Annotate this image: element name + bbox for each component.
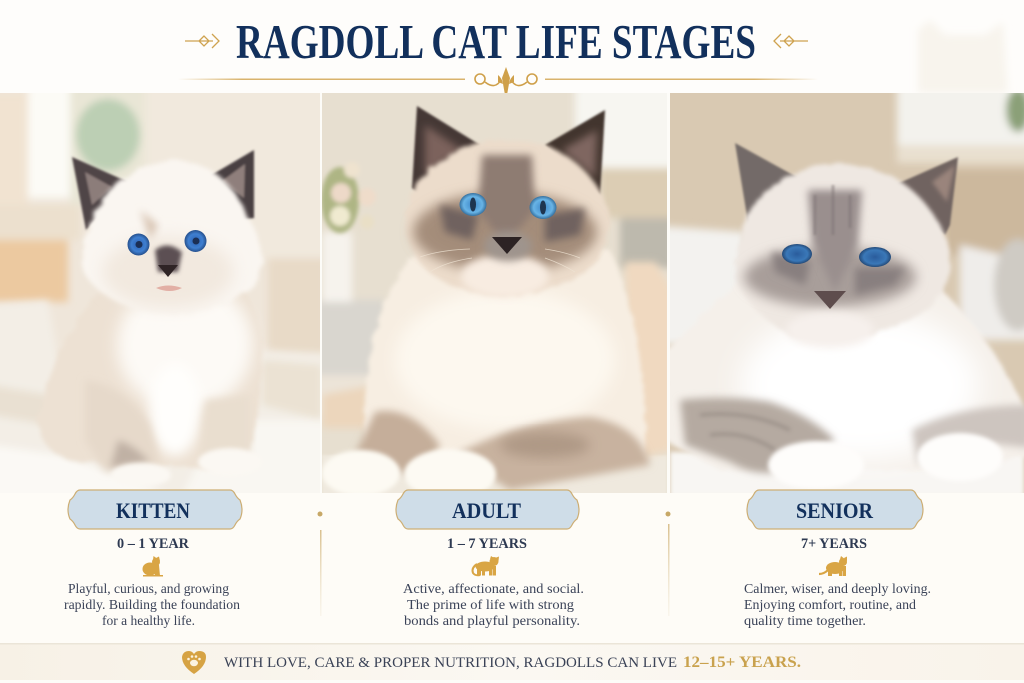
senior paws bbox=[766, 430, 1003, 480]
senior eyes bbox=[782, 244, 812, 264]
kitten room background bbox=[0, 85, 330, 354]
description: adult: Active, affectionate, and social. bbox=[403, 581, 584, 596]
photo panel: senior bbox=[660, 85, 1024, 497]
icon: senior silhouette bbox=[819, 556, 847, 576]
senior mask bbox=[744, 247, 916, 307]
separator: left bbox=[318, 512, 322, 616]
photo panel: adult bbox=[315, 85, 675, 500]
description: kitten: Playful, curious, and growing bbox=[68, 581, 229, 596]
kitten cat bbox=[38, 150, 262, 487]
stage badge: kitten bbox=[68, 490, 242, 529]
adult mask bbox=[413, 192, 597, 272]
stage badge: senior bbox=[747, 490, 923, 529]
adult room background bbox=[322, 93, 667, 373]
description: senior: Calmer, wiser, and deeply loving. bbox=[744, 581, 931, 596]
age: adult: 1 – 7 YEARS bbox=[447, 536, 527, 552]
separator: right bbox=[666, 512, 670, 616]
adult cat bbox=[322, 106, 650, 499]
adult eyes bbox=[460, 193, 486, 216]
kitten eyes bbox=[128, 234, 150, 256]
description: adult: bonds and playful personality. bbox=[404, 613, 580, 628]
senior ears bbox=[735, 143, 958, 235]
footer banner bbox=[0, 643, 1024, 683]
gold divider bbox=[178, 67, 818, 95]
column: kitten bbox=[64, 490, 242, 628]
senior legs bbox=[680, 398, 1024, 473]
adult front legs bbox=[355, 411, 650, 490]
description: kitten bbox=[64, 581, 240, 628]
header band bbox=[0, 0, 1024, 95]
age: senior: 7+ YEARS bbox=[801, 536, 867, 552]
senior cat bbox=[665, 143, 1024, 489]
description: senior: quality time together. bbox=[744, 613, 866, 628]
stage badge: kitten: KITTEN bbox=[116, 498, 190, 523]
description: adult: The prime of life with strong bbox=[407, 597, 574, 612]
stage badge: adult bbox=[396, 490, 579, 529]
footer highlight: 12–15+ YEARS. bbox=[683, 654, 801, 671]
title: RAGDOLL CAT LIFE STAGES bbox=[236, 14, 756, 69]
kitten ears bbox=[72, 150, 254, 230]
column: adult bbox=[396, 490, 584, 628]
flowers bbox=[322, 164, 371, 236]
kitten head bbox=[82, 160, 262, 315]
adult head bbox=[405, 140, 610, 295]
age: kitten: 0 – 1 YEAR bbox=[117, 536, 190, 552]
footer message: WITH LOVE, CARE & PROPER NUTRITION, RAGDOLLS CAN LIVE bbox=[224, 655, 677, 671]
icon: adult silhouette bbox=[472, 556, 499, 576]
adult ears bbox=[412, 106, 605, 195]
photo panel: kitten bbox=[0, 85, 330, 510]
title ornament: left bbox=[185, 34, 219, 48]
description: senior: Enjoying comfort, routine, and bbox=[744, 597, 916, 612]
icon: kitten silhouette bbox=[142, 556, 163, 576]
kitten paws bbox=[112, 446, 252, 484]
description: kitten: for a healthy life. bbox=[102, 613, 195, 628]
description: adult bbox=[403, 581, 584, 628]
senior room background bbox=[660, 85, 1024, 345]
description: senior bbox=[744, 581, 931, 628]
column: senior bbox=[744, 490, 931, 628]
adult paws bbox=[322, 449, 496, 499]
description: kitten: rapidly. Building the foundation bbox=[64, 597, 240, 612]
stage badge: senior: SENIOR bbox=[796, 498, 874, 523]
title ornament: right bbox=[774, 34, 808, 48]
lower text panel background bbox=[0, 493, 1024, 644]
icon: heart with paw bbox=[182, 651, 206, 674]
stage badge: adult: ADULT bbox=[452, 498, 521, 523]
senior head bbox=[735, 164, 951, 340]
kitten blanket bbox=[0, 300, 330, 510]
